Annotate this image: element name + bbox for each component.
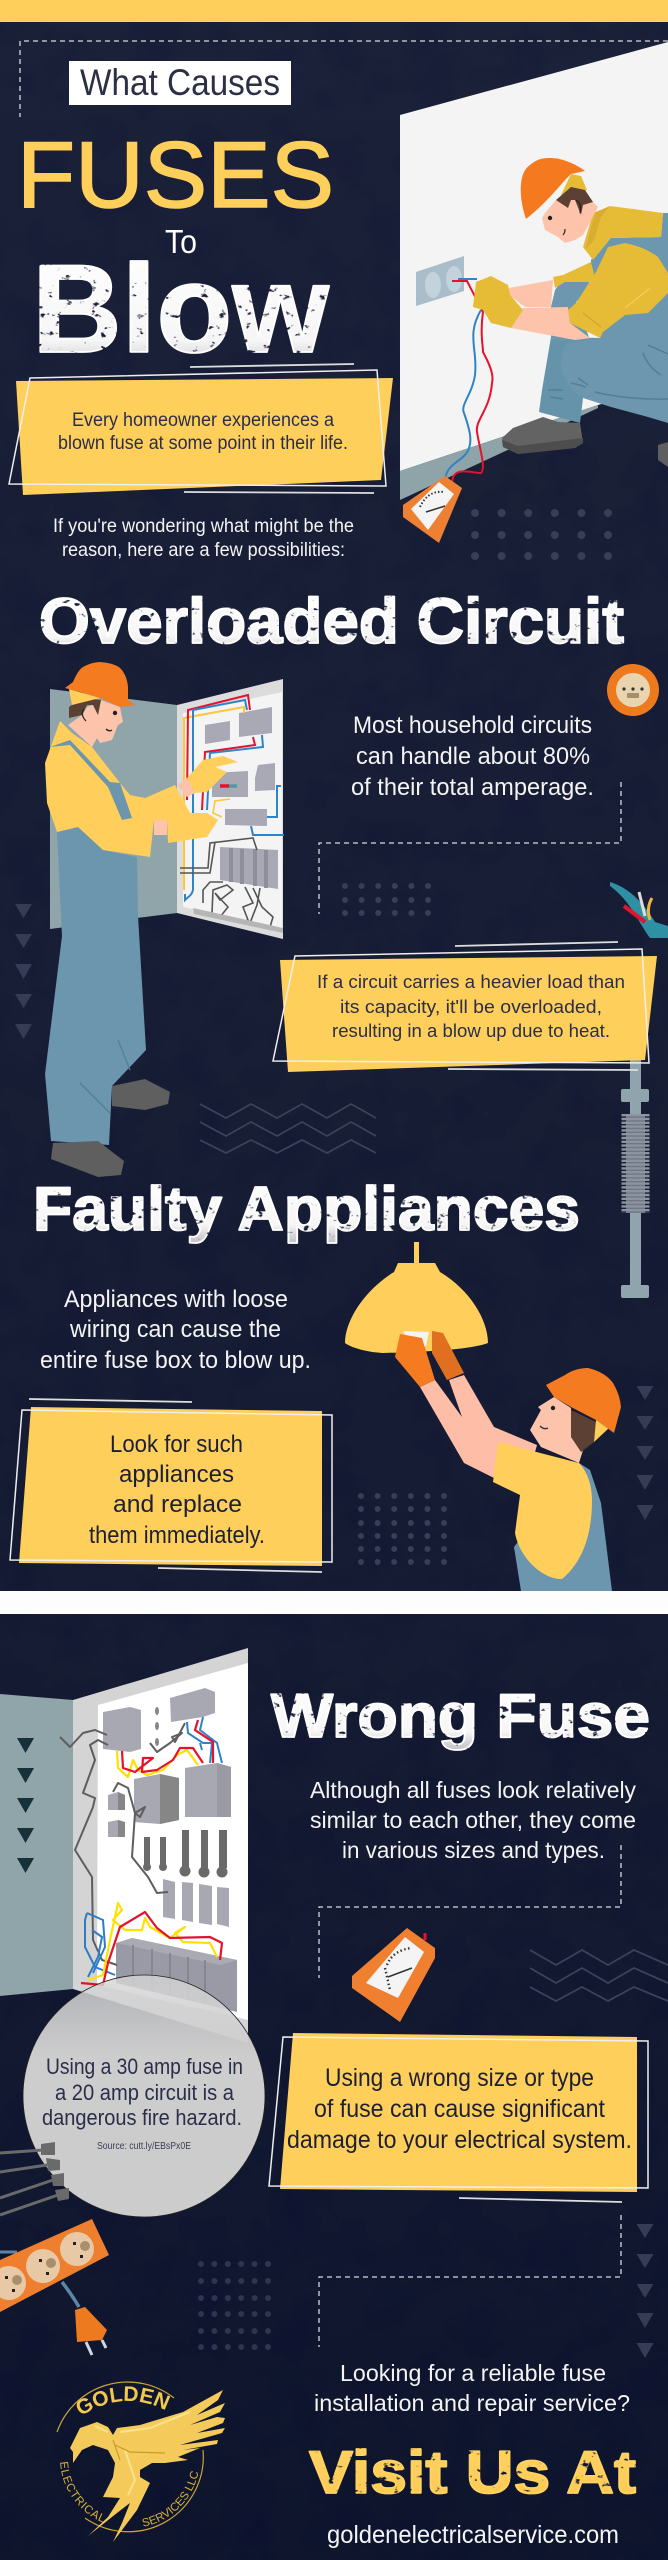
icon: hard hat <box>521 158 585 219</box>
icon: hard hat <box>546 1368 621 1433</box>
background: upper section <box>0 0 668 1592</box>
callout: wrong size or type: of fuse can cause significant <box>314 2095 605 2123</box>
heading: Overloaded Circuit: Overloaded Circuit <box>39 585 624 657</box>
text: source: Source: cutt.ly/EBsPx0E <box>97 2140 191 2152</box>
callout: wrong size or type <box>269 2033 648 2202</box>
callout: heavier load: its capacity, it'll be overloaded, <box>340 996 602 1017</box>
callout: every homeowner: blown fuse at some point in their life. <box>58 433 348 454</box>
icon: cable end <box>610 882 668 938</box>
circle callout: dangerous fire hazard: a 20 amp circuit is a <box>55 2080 235 2105</box>
heading: To: To <box>165 223 197 260</box>
heading: Faulty Appliances: Faulty Appliances <box>33 1175 580 1244</box>
icon: lamp <box>345 1242 488 1353</box>
sleeve <box>568 243 668 338</box>
icon: insulator <box>621 1058 649 1298</box>
icon: boots <box>51 1079 170 1177</box>
callout: look for such appliances: and replace <box>113 1491 242 1518</box>
illustration: worker testing wall outlet <box>400 42 668 543</box>
logo: Golden Electrical Services <box>56 2381 225 2542</box>
illustration: worker changing lamp bulb <box>345 1242 621 1591</box>
circle callout: dangerous fire hazard: dangerous fire hazard. <box>42 2105 242 2130</box>
icon: multimeter <box>352 1928 435 2022</box>
logo: Golden Electrical Services: GOLDEN <box>76 2386 170 2414</box>
text: most household circuits <box>351 712 594 801</box>
text: appliances with loose wiring: entire fuse box to blow up. <box>40 1347 311 1374</box>
overalls <box>539 213 668 423</box>
text: intro: reason, here are a few possibilities: <box>62 540 345 561</box>
text: intro <box>53 516 354 561</box>
callout: every homeowner <box>9 364 393 495</box>
text: all fuses look similar: in various sizes and types. <box>342 1837 605 1863</box>
icon: hard hat <box>65 662 135 707</box>
circle callout: dangerous fire hazard: Using a 30 amp fuse in <box>46 2054 243 2079</box>
heading: What Causes: What Causes <box>80 62 280 103</box>
shirt <box>45 721 218 857</box>
heading: Blow: Blow <box>32 240 330 379</box>
icon: power strip <box>0 2219 109 2355</box>
wires <box>60 1723 185 1965</box>
text: looking for service: Looking for a reliable fuse <box>340 2360 606 2386</box>
circle callout: dangerous fire hazard <box>23 1975 265 2217</box>
text: appliances with loose wiring: Appliances with loose <box>64 1286 288 1313</box>
text: all fuses look similar: Although all fuses look relatively <box>310 1777 636 1803</box>
illustration: open fuse box <box>0 1648 248 2043</box>
icon: wall outlet <box>416 256 464 306</box>
icon: gloves <box>187 756 238 793</box>
text: most household circuits: Most household circuits <box>353 712 592 739</box>
text: looking for service <box>314 2360 630 2416</box>
text: most household circuits: of their total amperage. <box>351 774 594 801</box>
text: appliances with loose wiring <box>40 1286 311 1374</box>
top yellow bar <box>0 0 668 22</box>
icon: multimeter <box>403 476 462 543</box>
text: all fuses look similar <box>310 1777 636 1863</box>
text: all fuses look similar: similar to each other, they come <box>310 1807 636 1833</box>
panel: header <box>17 41 668 379</box>
callout: heavier load: resulting in a blow up due to heat. <box>332 1020 610 1041</box>
icon: glove <box>473 276 523 328</box>
logo: Golden Electrical Services: SERVICES LLC <box>142 2471 198 2526</box>
callout: look for such appliances: appliances <box>119 1461 234 1488</box>
callout: look for such appliances <box>10 1399 332 1572</box>
callout: wrong size or type: damage to your electrical system. <box>287 2126 632 2154</box>
text: website: goldenelectricalservice.com <box>327 2521 619 2549</box>
illustration: worker at fuse panel <box>45 662 284 1177</box>
boots <box>502 417 668 467</box>
logo: Golden Electrical Services: ELECTRICAL <box>60 2462 103 2522</box>
callout: heavier load: If a circuit carries a heavier load than <box>317 971 625 992</box>
callout: wrong size or type: Using a wrong size or type <box>325 2064 594 2092</box>
boxes <box>103 1688 231 1927</box>
heading: Wrong Fuse: Wrong Fuse <box>271 1682 650 1751</box>
text: looking for service: installation and repair service? <box>314 2390 630 2416</box>
text: most household circuits: can handle about 80% <box>356 743 590 770</box>
fuse box components <box>205 707 278 889</box>
face <box>68 700 123 747</box>
icon: eagle <box>70 2390 225 2542</box>
background: lower section <box>0 1614 668 2560</box>
white divider band <box>0 1591 668 1614</box>
callout: look for such appliances: them immediately. <box>89 1522 265 1549</box>
icon: orange outlet <box>607 664 659 716</box>
heading: FUSES: FUSES <box>17 122 334 227</box>
callout: look for such appliances: Look for such <box>110 1431 243 1458</box>
text: appliances with loose wiring: wiring can cause the <box>69 1316 281 1343</box>
face <box>542 190 598 243</box>
icon: gloves <box>395 1331 464 1387</box>
heading: Visit Us At: Visit Us At <box>309 2439 636 2506</box>
callout: every homeowner: Every homeowner experiences a <box>72 410 334 431</box>
icon: loose cables <box>0 2142 69 2215</box>
text: intro: If you're wondering what might be the <box>53 516 354 537</box>
collar <box>583 206 663 260</box>
callout: heavier load <box>273 942 657 1072</box>
